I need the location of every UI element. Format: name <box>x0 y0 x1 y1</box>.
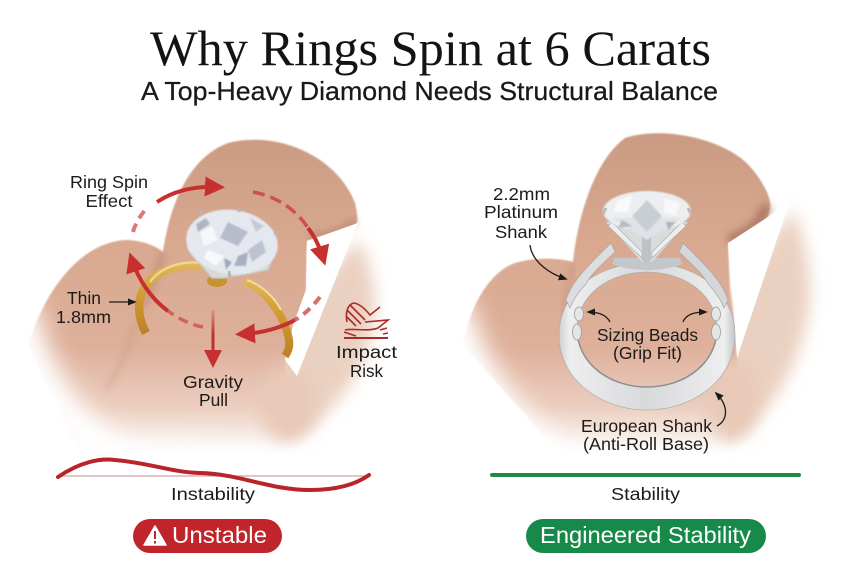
label: 2.2mm platinum shank: 2.2mm <box>493 184 550 204</box>
label: 2.2mm platinum shank: Shank <box>495 222 547 242</box>
icon: impact hand <box>344 303 388 338</box>
diamond: round solitaire <box>603 191 691 262</box>
hand photo: right <box>450 133 810 482</box>
platinum ring band <box>559 243 735 410</box>
gravity arrow <box>204 310 222 368</box>
label: gravity pull: Gravity <box>183 372 243 392</box>
sizing beads <box>572 307 720 340</box>
label: ring spin effect: Ring Spin <box>70 172 148 192</box>
instability wave <box>58 460 369 490</box>
pill: unstable <box>133 519 282 553</box>
panel: engineered platinum ring <box>450 133 810 482</box>
hand photo: left <box>16 140 375 475</box>
subtitle: A Top-Heavy Diamond Needs Structural Balance <box>141 76 718 106</box>
icon: warning triangle <box>144 526 166 545</box>
label: impact risk <box>336 342 397 381</box>
label: ring spin effect <box>70 172 148 211</box>
panel: unstable thin ring <box>16 140 397 475</box>
label: sizing beads: Sizing Beads <box>597 325 698 345</box>
pill: engineered stability <box>526 519 766 553</box>
label: 2.2mm platinum shank <box>484 184 566 279</box>
label: instability: Instability <box>171 484 255 504</box>
label: impact risk: Impact <box>336 342 397 362</box>
label: ring spin effect: Effect <box>86 191 133 211</box>
label: gravity pull <box>183 372 243 410</box>
label: sizing beads: (Grip Fit) <box>613 343 682 363</box>
label: thin 1.8mm: Thin <box>67 288 101 308</box>
diamond: oval solitaire <box>182 204 282 280</box>
title: Why Rings Spin at 6 Carats <box>150 20 711 76</box>
label: thin 1.8mm <box>56 288 135 327</box>
label: stability: Stability <box>611 484 680 504</box>
label: thin 1.8mm: 1.8mm <box>56 307 111 327</box>
label: sizing beads <box>588 312 706 363</box>
label: 2.2mm platinum shank: Platinum <box>484 202 558 222</box>
pill: engineered stability: Engineered Stability <box>540 522 752 548</box>
pill: unstable: Unstable <box>172 522 267 548</box>
label: gravity pull: Pull <box>199 390 228 410</box>
stability line <box>490 473 801 477</box>
label: european shank: European Shank <box>581 416 712 436</box>
label: impact risk: Risk <box>350 361 383 381</box>
label: european shank <box>581 393 726 454</box>
gold ring band <box>139 262 289 356</box>
label: european shank: (Anti-Roll Base) <box>583 434 709 454</box>
ring spin arrows <box>132 187 323 334</box>
